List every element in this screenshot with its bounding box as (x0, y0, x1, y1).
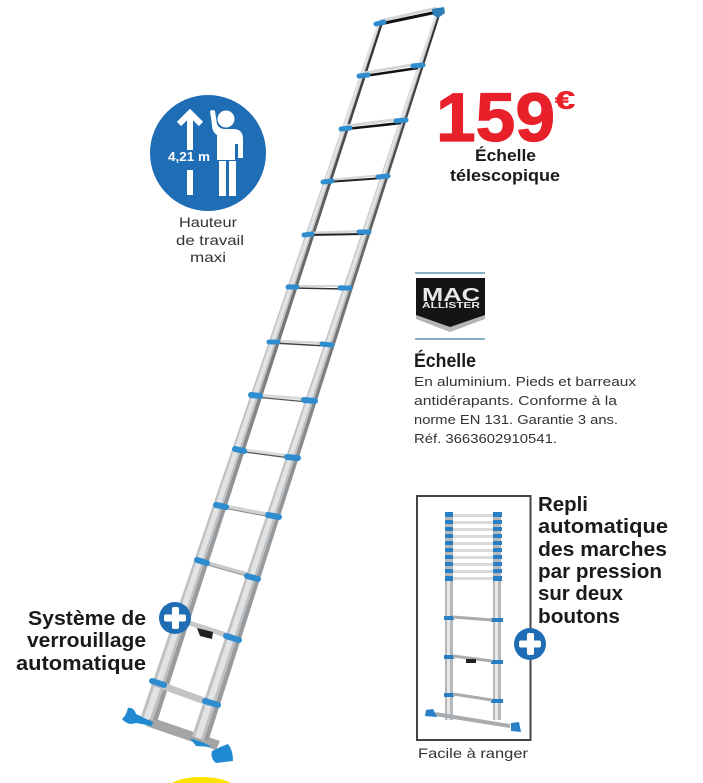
description body: En aluminium. Pieds et barreaux (414, 374, 637, 389)
brand logo: Mac Allister: MAC (422, 285, 480, 305)
callout: Système de verrouillage automatique (16, 608, 146, 675)
caption: Hauteur de travail maxi: Hauteur (179, 214, 237, 230)
left rail (141, 22, 383, 722)
price: 159 (436, 79, 555, 156)
inset blue collars stack (444, 512, 503, 703)
height icon: 4,21 m (150, 95, 266, 211)
main telescopic ladder (122, 7, 445, 763)
arrow up (179, 113, 201, 195)
inset lower rungs (435, 617, 510, 726)
product title: télescopique (450, 166, 560, 185)
rail bottom collar (190, 738, 212, 747)
description body: Réf. 3663602910541. (414, 431, 557, 446)
inset panel: folded ladder (417, 496, 530, 740)
base stabiliser bar (146, 717, 220, 750)
description heading: Échelle (414, 350, 476, 372)
caption: Hauteur de travail maxi (176, 214, 244, 265)
product title (450, 146, 560, 185)
rungs (155, 8, 437, 703)
callout: Système de verrouillage automatique: Système de (28, 608, 146, 630)
callout: Repli automatique: par pression (538, 561, 662, 583)
price: € (555, 87, 575, 115)
brand logo: Mac Allister (415, 273, 485, 339)
top cap (432, 7, 445, 18)
plus icon on ladder (159, 602, 191, 634)
plus icon on inset (514, 628, 546, 660)
person figure (210, 110, 243, 196)
left foot (122, 708, 153, 726)
caption: Hauteur de travail maxi: de travail (176, 232, 244, 248)
inset latch (466, 659, 476, 663)
right foot (212, 744, 233, 763)
callout: Repli automatique: des marches (538, 539, 667, 561)
brand logo: Mac Allister: ALLISTER (422, 301, 480, 310)
callout: Repli automatique: sur deux (538, 583, 623, 605)
locking latch (197, 628, 213, 639)
blue rung collars (152, 22, 423, 705)
inset rails (445, 512, 453, 720)
callout: Repli automatique (538, 494, 668, 628)
description body: antidérapants. Conforme à la (414, 393, 618, 408)
callout: Repli automatique: Repli (538, 494, 588, 516)
callout: Système de verrouillage automatique: verrouillage (27, 630, 146, 652)
inset caption: Facile à ranger (418, 745, 528, 761)
description body (414, 374, 637, 446)
height value: 4,21 m (168, 150, 210, 164)
inset stacked rungs (450, 514, 495, 580)
callout: Système de verrouillage automatique: automatique (16, 653, 146, 675)
callout: Repli automatique: automatique (538, 516, 668, 538)
yellow badge peeking at bottom (172, 777, 231, 783)
inset feet (425, 709, 437, 717)
callout: Repli automatique: boutons (538, 606, 620, 628)
caption: Hauteur de travail maxi: maxi (190, 249, 226, 265)
right rail (192, 12, 441, 742)
description body: norme EN 131. Garantie 3 ans. (414, 412, 618, 427)
product title: Échelle (475, 146, 536, 165)
